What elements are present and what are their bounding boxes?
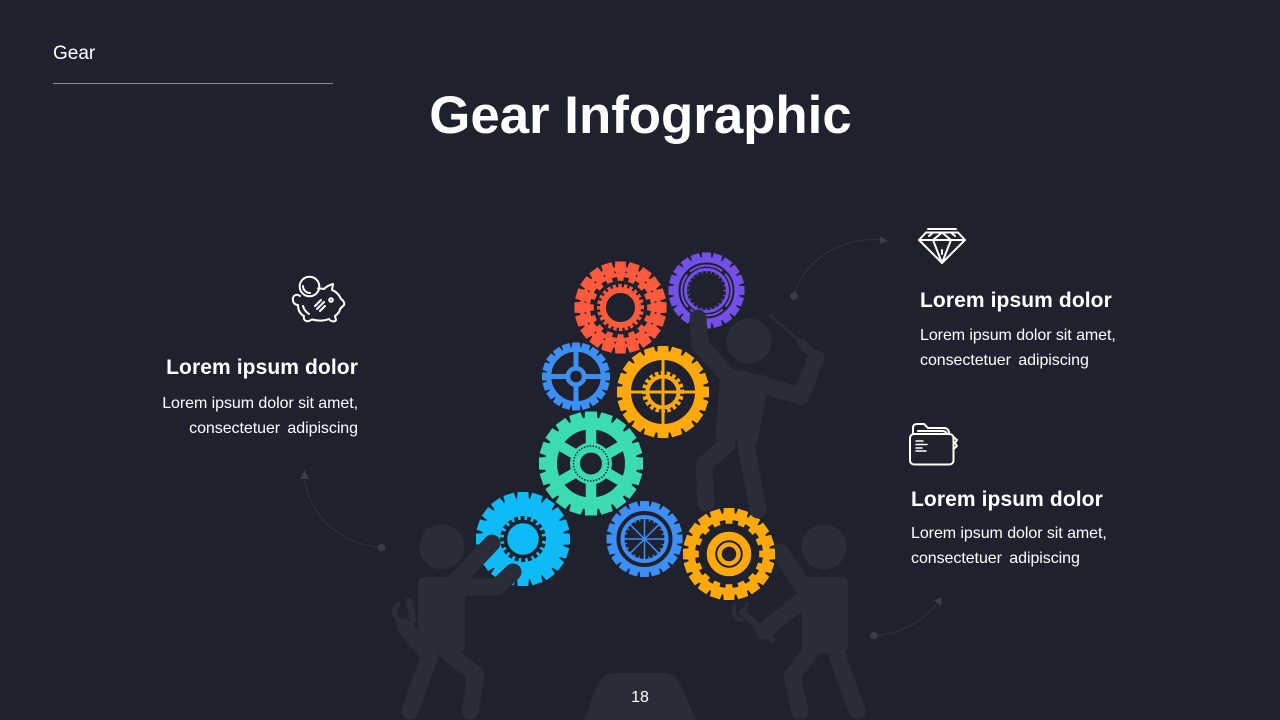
- left body: [162, 395, 358, 437]
- top right body: consectetuer adipiscing: [920, 352, 1089, 369]
- section label: Gear: [53, 43, 95, 64]
- gear: blue with cross spokes: [542, 342, 610, 410]
- bottom right heading: Lorem ipsum dolor: [911, 488, 1103, 511]
- icon: diamond: [919, 229, 965, 263]
- arrow: top right: [790, 236, 888, 300]
- title: Gear Infographic: [429, 86, 852, 145]
- text block: bottom right: [911, 488, 1107, 567]
- bottom right body: [911, 525, 1107, 567]
- text block: top right: [920, 289, 1116, 369]
- arrow: left: [300, 470, 385, 551]
- icon: piggy bank: [293, 277, 344, 321]
- top right body: Lorem ipsum dolor sit amet,: [920, 327, 1116, 344]
- gear: amber with crosshair: [617, 346, 709, 438]
- gear: blue with eight thin spokes: [606, 501, 682, 577]
- gear: red: [574, 262, 666, 354]
- top right body: [920, 327, 1116, 369]
- figure: left worker: [394, 524, 513, 711]
- page number: 18: [631, 689, 649, 706]
- top right heading: Lorem ipsum dolor: [920, 289, 1112, 312]
- left body: Lorem ipsum dolor sit amet,: [162, 395, 358, 412]
- figure: right worker: [734, 524, 857, 711]
- bottom right body: consectetuer adipiscing: [911, 550, 1080, 567]
- bottom right body: Lorem ipsum dolor sit amet,: [911, 525, 1107, 542]
- gear: green with six spokes: [539, 412, 643, 516]
- left body: consectetuer adipiscing: [189, 420, 358, 437]
- gear: cyan solid: [476, 492, 570, 586]
- icon: folder wallet: [910, 424, 957, 464]
- gear: amber with concentric rings: [683, 508, 775, 600]
- arrow: bottom right: [870, 598, 942, 639]
- gear: purple: [668, 252, 744, 328]
- figure: pedestal: [584, 673, 696, 720]
- left heading: Lorem ipsum dolor: [166, 356, 358, 379]
- figure: top worker: [698, 316, 816, 510]
- text block: left: [162, 356, 358, 437]
- header divider: [53, 83, 333, 84]
